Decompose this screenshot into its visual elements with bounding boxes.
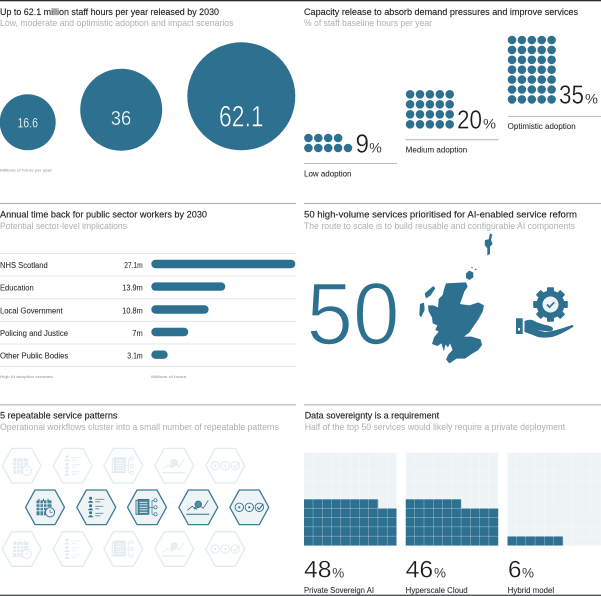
heading: 50 services: 50 high-volume services prioritised for AI-enabled service reform (304, 209, 577, 219)
bar row: Local Government: Local Government (0, 306, 64, 315)
value: 9%: 9 (356, 128, 369, 158)
hexagon icon: calendar (26, 490, 64, 525)
waffle chart: hybrid model 6% (508, 453, 601, 546)
heading: staff hours: Up to 62.1 million staff hours per year released by 2030 (0, 7, 219, 17)
footnote: unit: Millions of hours (151, 374, 186, 379)
bubble: low 16.6 (0, 94, 56, 150)
value: 48% (304, 557, 344, 584)
dot group: medium adoption 20% (406, 90, 454, 129)
subheading: workflows: Operational workflows cluster into a small number of repeatable patterns (0, 422, 279, 432)
page frame top rule (0, 0, 601, 1)
value: 6%: 6 (508, 557, 522, 584)
bubble: moderate 36: 36 (111, 108, 131, 130)
bar row: NHS Scotland (0, 260, 295, 270)
bar row: NHS Scotland: NHS Scotland (0, 261, 48, 270)
value: 6%: % (522, 565, 534, 581)
value: 9%: % (369, 140, 382, 156)
waffle chart: hyperscale cloud 46% (406, 453, 498, 546)
label: hybrid model: Hybrid model (508, 586, 554, 595)
label: hyperscale cloud: Hyperscale Cloud (406, 586, 468, 595)
hexagon icon: documents (128, 490, 166, 525)
value: 35%: 35 (559, 80, 584, 110)
value: 48%: % (332, 565, 344, 581)
panel: annual time back (0, 203, 296, 379)
rule: medium adoption (406, 139, 498, 140)
heading: service patterns: 5 repeatable service patterns (0, 411, 118, 421)
map of Scotland (419, 233, 493, 363)
dot group: optimistic adoption 35% (508, 36, 556, 104)
bar row: Policing and Justice: 7m (132, 329, 143, 338)
bar row: Policing and Justice: Policing and Justice (0, 329, 68, 338)
bar row: Other Public Bodies: Other Public Bodies (0, 352, 68, 361)
subheading: route to scale: The route to scale is to build reusable and configurable AI components (304, 221, 575, 231)
bubble: moderate 36 (80, 69, 162, 151)
bar row: NHS Scotland: 27.1m (124, 261, 143, 270)
bubble: optimistic 62.1 (187, 42, 295, 150)
value: 46%: 46 (406, 557, 433, 584)
panel: data sovereignty (304, 404, 601, 595)
panel: staff hours released (0, 7, 295, 172)
value: 48%: 48 (304, 557, 332, 584)
dot group: low adoption 9% (304, 134, 352, 152)
hexagon icon: chart analysis (179, 490, 218, 525)
big number 50: 50 (306, 264, 400, 363)
bubble: optimistic 62.1: 62.1 (219, 101, 264, 134)
icon part: gear (533, 287, 568, 322)
value: 46%: % (434, 565, 446, 581)
bar row: Education (0, 282, 225, 293)
subheading: baseline hours: % of staff baseline hours per year (304, 18, 432, 28)
panel: 5 service patterns (0, 404, 296, 566)
faded hexagon row: top (2, 448, 245, 483)
icon: hand holding gear (516, 287, 573, 338)
heading: capacity release: Capacity release to absorb demand pressures and improve services (304, 7, 578, 17)
heading: time back: Annual time back for public sector workers by 2030 (0, 209, 207, 219)
bar row: Education: 13.9m (122, 284, 143, 293)
bar row: Other Public Bodies (0, 350, 168, 361)
icon part: hand (516, 318, 573, 338)
bubble: low 16.6: 16.6 (17, 115, 38, 130)
bar row: Local Government: 10.8m (122, 306, 143, 315)
rule: low adoption (304, 163, 397, 164)
waffle chart: private sovereign 48% (304, 453, 397, 546)
value: 9% (356, 128, 382, 158)
hexagon row: five active patterns (26, 490, 269, 525)
value: 35%: % (585, 90, 598, 106)
panel: capacity release (304, 7, 601, 178)
value: 6% (508, 557, 534, 584)
bar row: Local Government (0, 305, 209, 315)
faded hexagon row: bottom (2, 532, 245, 566)
label: private sovereign AI: Private Sovereign AI (304, 586, 374, 595)
label: low adoption: Low adoption (304, 169, 352, 178)
page frame bottom rule (0, 595, 601, 596)
rule: optimistic adoption (508, 116, 601, 117)
label: medium adoption: Medium adoption (406, 145, 467, 154)
value: 20%: % (483, 116, 496, 132)
hexagon icon: process check (230, 490, 269, 525)
subheading: private deployment: Half of the top 50 services would likely require a private deployment (305, 422, 566, 432)
footnote: scenario: High AI adoption scenario (0, 374, 54, 379)
panel: 50 services (304, 203, 601, 363)
value: 20%: 20 (457, 105, 482, 135)
label: optimistic adoption: Optimistic adoption (508, 122, 576, 131)
bar row: Other Public Bodies: 3.1m (127, 352, 143, 361)
subheading: scenarios: Low, moderate and optimistic adoption and impact scenarios (0, 18, 234, 28)
heading: data sovereignty: Data sovereignty is a requirement (305, 411, 440, 421)
axis note: Millions of hours per year (0, 168, 53, 172)
bar row: Education: Education (0, 284, 34, 293)
hexagon icon: people list (77, 490, 116, 525)
subheading: sector implications: Potential sector-level implications (0, 221, 127, 231)
bar row: Policing and Justice (0, 328, 188, 338)
value: 46% (406, 557, 446, 584)
